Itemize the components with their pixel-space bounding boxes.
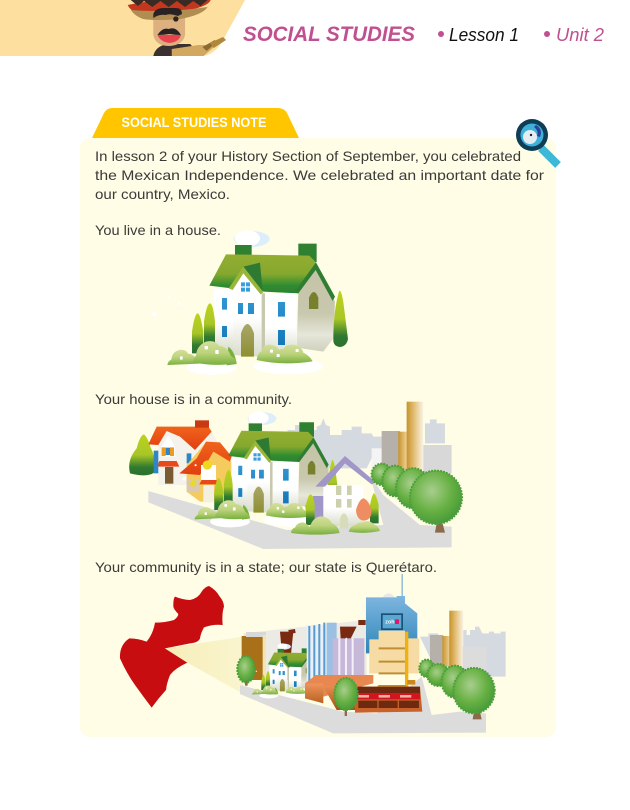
map: Querétaro with city scene xyxy=(120,574,506,733)
panel background xyxy=(80,138,556,737)
map shape xyxy=(120,586,224,708)
icon: magnifying glass xyxy=(516,119,558,165)
intro paragraph: In lesson 2 of your History Section of September, you celebrated xyxy=(95,148,521,164)
text: you live in a house: You live in a house. xyxy=(95,222,221,238)
panel: social studies note xyxy=(80,108,558,737)
intro paragraph: our country, Mexico. xyxy=(95,186,230,202)
tab heading xyxy=(92,108,299,138)
intro paragraph: the Mexican Independence. We celebrated an important date for xyxy=(95,167,544,183)
intro paragraph xyxy=(95,148,544,202)
illustration: community xyxy=(129,402,462,549)
tab heading: SOCIAL STUDIES NOTE xyxy=(122,114,266,130)
projection cone xyxy=(165,637,243,694)
header banner xyxy=(0,0,604,56)
title: SOCIAL STUDIES xyxy=(243,22,416,46)
text: community in a state: Your community is in a state; our state is Querétaro. xyxy=(95,559,437,575)
lesson label: Lesson 1 xyxy=(449,25,519,45)
illustration: house xyxy=(152,230,348,375)
mascot: mariachi with guitar xyxy=(128,0,226,56)
map: Querétaro with city scene: zoh xyxy=(385,620,394,626)
unit label: Unit 2 xyxy=(556,25,604,45)
text: house in community: Your house is in a community. xyxy=(95,391,292,407)
